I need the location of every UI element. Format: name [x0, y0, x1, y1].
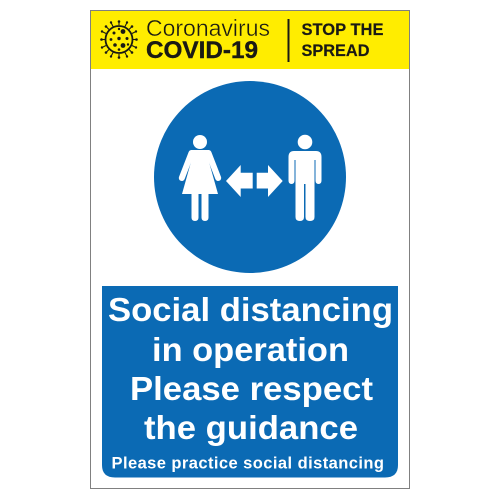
icon: woman: [182, 135, 218, 221]
text: STOP THE: STOP THE: [302, 20, 384, 39]
icon: man: [288, 135, 322, 221]
text: the guidance: the guidance: [144, 410, 358, 447]
yellow header banner: [91, 11, 409, 69]
text: SPREAD: SPREAD: [302, 41, 370, 60]
text: Social distancing: Social distancing: [108, 292, 393, 329]
blue text panel: [102, 286, 398, 478]
text: Please practice social distancing: Please practice social distancing: [112, 454, 384, 472]
blue circle pictogram: [154, 81, 346, 273]
icon: double arrow: [226, 165, 283, 197]
divider bar: [288, 19, 290, 62]
text: Please respect: Please respect: [130, 371, 373, 408]
sign frame: [90, 10, 410, 488]
heading: COVID-19: COVID-19: [146, 37, 258, 64]
icon: coronavirus: [100, 20, 138, 59]
text: in operation: in operation: [152, 332, 349, 369]
heading: Coronavirus: Coronavirus: [146, 15, 270, 41]
